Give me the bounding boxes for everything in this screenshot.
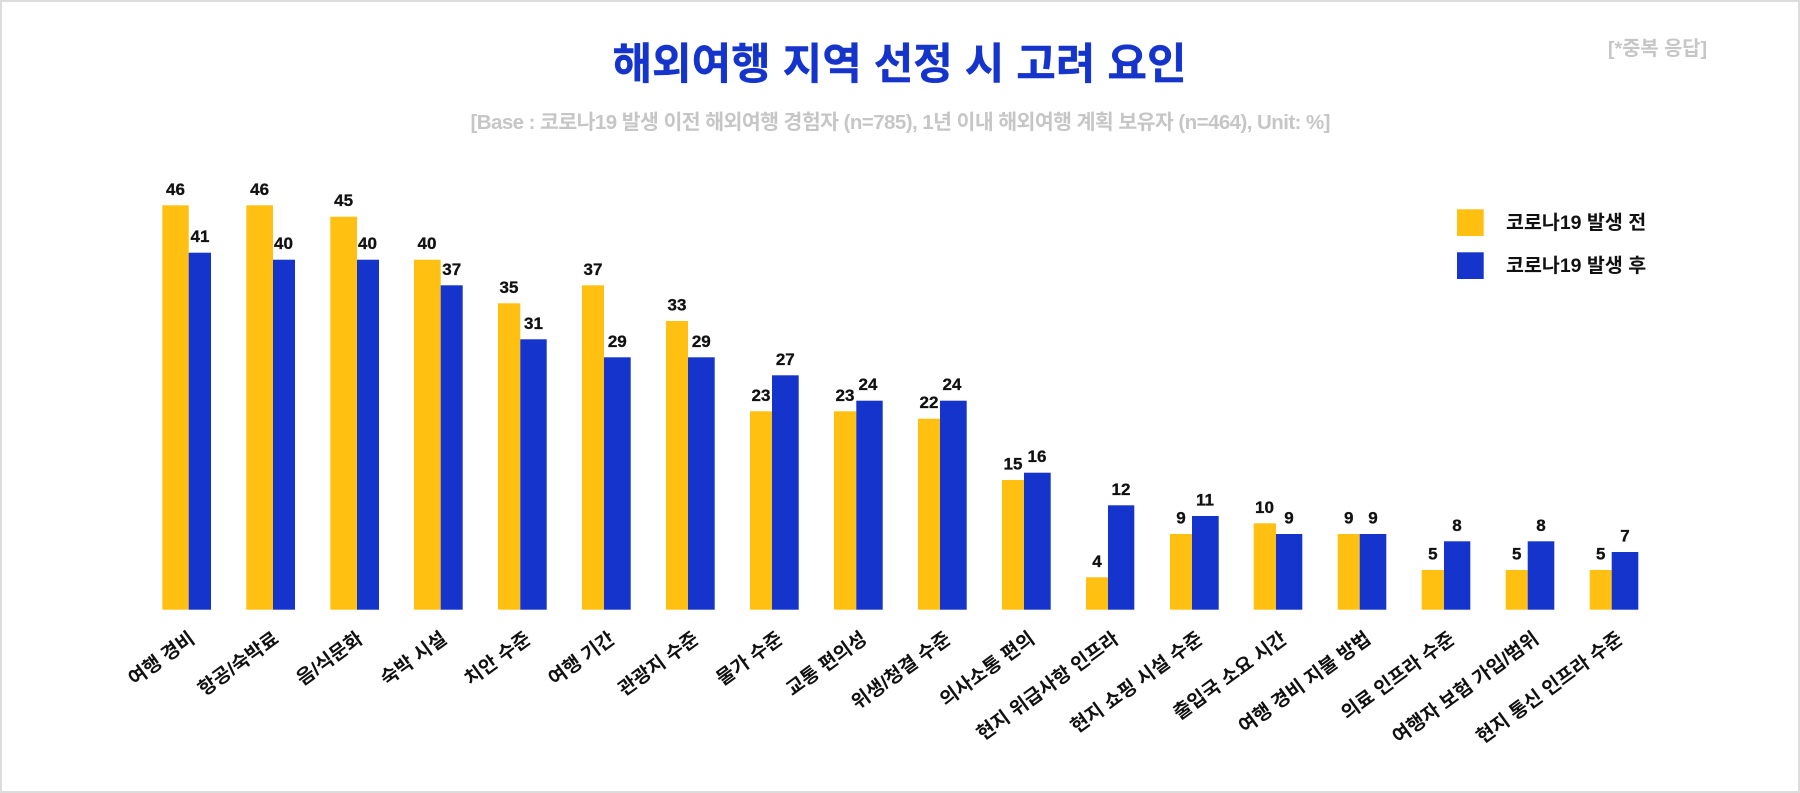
x-axis category labels: 교통 편의성 xyxy=(782,628,871,701)
bars: 현지 쇼핑 시설 수준: 11 xyxy=(1196,490,1214,510)
bars: 치안 수준 xyxy=(498,278,547,610)
bars: 여행자 보험 가입/범위 xyxy=(1506,516,1554,610)
bars: 여행 경비 지불 방법: 9 xyxy=(1368,508,1378,528)
legend: 코로나19 발생 전 xyxy=(1506,212,1646,234)
x-axis category labels: 음/식문화 xyxy=(293,628,367,690)
bars: 항공/숙박료 xyxy=(246,180,295,610)
title: 해외여행 지역 선정 시 고려 요인 xyxy=(612,41,1187,89)
x-axis category labels: 여행 경비 xyxy=(125,628,199,690)
bars: 치안 수준: 35 xyxy=(500,278,518,297)
x-axis category labels: 숙박 시설 xyxy=(377,628,451,690)
bars: 교통 편의성: 23 xyxy=(836,386,854,405)
bars: 의사소통 편의 xyxy=(1002,447,1051,610)
bars: 치안 수준: 31 xyxy=(524,314,543,333)
bars: 숙박 시설: 40 xyxy=(418,234,436,253)
bars: 여행 기간: 37 xyxy=(584,260,602,279)
bars: 음/식문화: 40 xyxy=(358,234,377,253)
bars: 음/식문화: 45 xyxy=(334,191,353,210)
bars: 물가 수준 xyxy=(750,350,799,610)
x-axis category labels: 항공/숙박료 xyxy=(194,628,283,701)
bars: 여행 기간 xyxy=(582,260,631,610)
x-axis category labels: 여행자 보험 가입/범위 xyxy=(1389,628,1543,748)
x-axis category labels: 여행 기간 xyxy=(545,628,619,690)
bars: 위생/청결 수준 xyxy=(918,375,967,610)
x-axis category labels: 위생/청결 수준 xyxy=(848,628,955,714)
bars: 출입국 소요 시간: 10 xyxy=(1255,498,1274,517)
x-axis category labels: 현지 통신 인프라 수준 xyxy=(1473,628,1627,748)
x-axis category labels: 치안 수준 xyxy=(461,628,535,690)
bars: 항공/숙박료: 40 xyxy=(274,234,293,253)
x-axis category labels: 출입국 소요 시간 xyxy=(1169,628,1291,724)
bars: 물가 수준: 27 xyxy=(776,350,795,369)
x-axis category labels: 현지 위급사항 인프라 xyxy=(973,628,1123,745)
bars: 의사소통 편의: 15 xyxy=(1004,454,1022,474)
bars: 출입국 소요 시간 xyxy=(1254,498,1302,610)
bars: 숙박 시설: 37 xyxy=(442,260,461,279)
bars: 현지 통신 인프라 수준: 7 xyxy=(1620,526,1630,546)
bars: 현지 위급사항 인프라 xyxy=(1086,480,1134,610)
x-axis category labels: 의사소통 편의 xyxy=(936,628,1039,711)
bars: 음/식문화 xyxy=(330,191,379,610)
legend: 코로나19 발생 후 xyxy=(1506,255,1646,277)
subtitle: base and unit: [Base : 코로나19 발생 이전 해외여행 경험자 (n=785), 1년 이내 해외여행 계획 보유자 (n=464), Unit: %] xyxy=(470,111,1330,134)
bars: 의료 인프라 수준: 8 xyxy=(1452,516,1462,535)
bars: 여행 경비 지불 방법: 9 xyxy=(1344,508,1353,528)
x-axis category labels: 현지 쇼핑 시설 수준 xyxy=(1067,628,1207,738)
bars: 여행자 보험 가입/범위: 8 xyxy=(1536,516,1546,535)
bars: 교통 편의성 xyxy=(834,375,883,610)
bars: 위생/청결 수준: 24 xyxy=(943,375,962,394)
bars: 현지 쇼핑 시설 수준: 9 xyxy=(1176,508,1186,528)
bars: 항공/숙박료: 46 xyxy=(250,180,269,199)
bars: 의료 인프라 수준: 5 xyxy=(1428,544,1438,564)
bars: 의료 인프라 수준 xyxy=(1422,516,1470,610)
bars: 위생/청결 수준: 22 xyxy=(920,393,938,412)
x-axis category labels: 의료 인프라 수준 xyxy=(1337,628,1459,724)
bars: 관광지 수준: 29 xyxy=(692,332,711,351)
bars: 숙박 시설 xyxy=(414,234,463,610)
bars: 여행자 보험 가입/범위: 5 xyxy=(1512,544,1521,564)
bars: 여행 경비: 46 xyxy=(166,180,185,199)
bars: 교통 편의성: 24 xyxy=(859,375,878,394)
bars: 여행 기간: 29 xyxy=(608,332,627,351)
bars: 물가 수준: 23 xyxy=(752,386,770,405)
x-axis category labels: 물가 수준 xyxy=(713,628,787,690)
bars: 여행 경비 지불 방법 xyxy=(1338,508,1386,610)
bars: 현지 통신 인프라 수준 xyxy=(1590,526,1638,610)
bars: 현지 위급사항 인프라: 4 xyxy=(1092,552,1102,571)
note: multiple response: [*중복 응답] xyxy=(1608,38,1707,60)
bars: 관광지 수준: 33 xyxy=(668,296,686,314)
x-axis category labels: 여행 경비 지불 방법 xyxy=(1235,628,1375,738)
bars: 의사소통 편의: 16 xyxy=(1028,447,1046,466)
x-axis category labels: 관광지 수준 xyxy=(614,628,703,701)
bars: 현지 위급사항 인프라: 12 xyxy=(1112,480,1130,499)
bars: 현지 쇼핑 시설 수준 xyxy=(1170,490,1219,610)
bars: 현지 통신 인프라 수준: 5 xyxy=(1596,544,1605,564)
bars: 관광지 수준 xyxy=(666,296,715,610)
bars: 여행 경비 xyxy=(162,180,211,610)
legend xyxy=(1457,209,1646,279)
x-axis category labels xyxy=(125,628,1627,748)
bars: 여행 경비: 41 xyxy=(191,227,209,246)
bar chart xyxy=(162,180,1638,610)
bars: 출입국 소요 시간: 9 xyxy=(1284,508,1294,528)
